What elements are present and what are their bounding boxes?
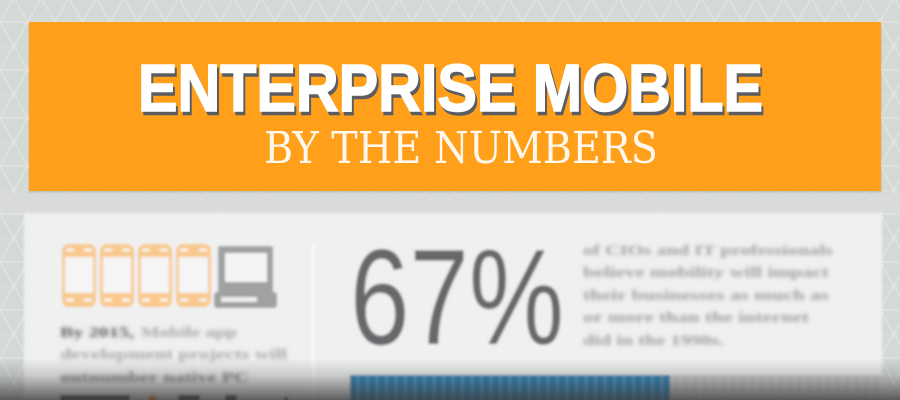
text: CIOs statistic: believe mobility will impact <box>583 265 829 281</box>
icon: orange marker <box>148 395 158 400</box>
bottom fade shadow <box>0 358 900 400</box>
text: CIOs statistic <box>583 243 833 349</box>
text: CIOs statistic: did in the 1990s. <box>583 333 724 349</box>
icon: phone 3 <box>138 244 172 307</box>
text: cut-off bottom row <box>60 395 288 400</box>
text: CIOs statistic: of CIOs and IT professionals <box>583 243 833 259</box>
title shadow: ENTERPRISE MOBILE <box>140 54 765 130</box>
icon: phone 4 <box>176 244 211 307</box>
text: mobile app projection: By 2015, <box>60 325 134 341</box>
text: CIOs statistic: or more than the internet <box>583 310 809 326</box>
text: mobile app projection <box>60 325 287 386</box>
bar chart: 67 percent stripe bar <box>350 375 882 400</box>
panel: statistics content <box>24 213 882 400</box>
divider <box>312 243 314 400</box>
icon: four phones and laptop <box>62 244 277 308</box>
icon: phone 2 <box>100 244 134 307</box>
text: mobile app projection: development projects will <box>60 347 287 363</box>
text: mobile app projection: outnumber native PC <box>60 370 249 386</box>
subtitle: BY THE NUMBERS <box>264 123 658 174</box>
icon: phone 1 <box>62 244 96 307</box>
icon: laptop <box>214 246 277 308</box>
title: ENTERPRISE MOBILE <box>138 51 763 126</box>
text: CIOs statistic: their businesses as much as <box>583 288 829 304</box>
text: mobile app projection: Mobile app <box>141 325 237 341</box>
big number: 67 percent: 67% <box>350 221 564 373</box>
banner: orange title block <box>29 22 881 192</box>
